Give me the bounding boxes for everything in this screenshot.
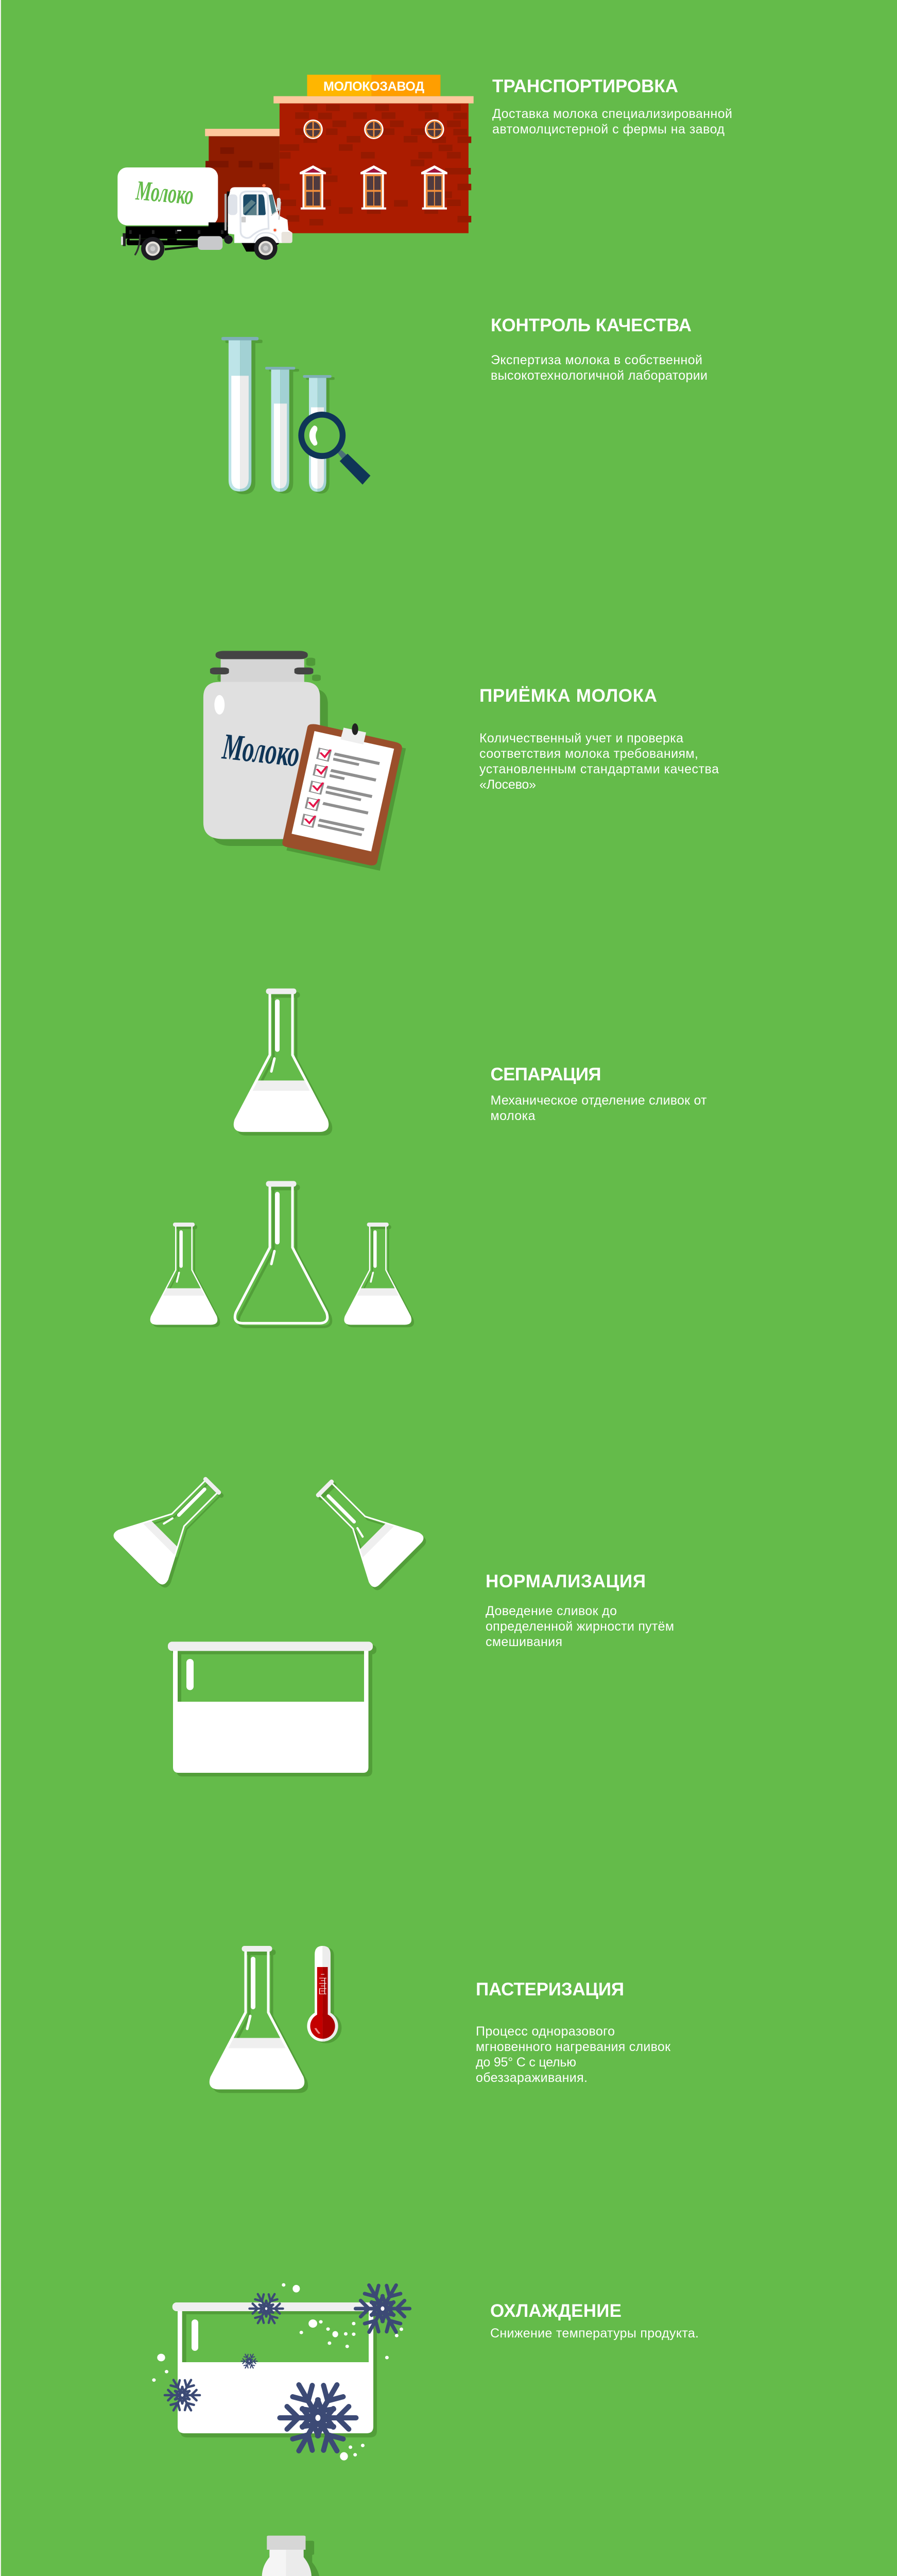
illustration: milk tanker truck [117,167,292,260]
description: соответствия молока требованиям, [479,747,698,761]
truck logo: Молоко [134,175,195,211]
illustration: cream bottle [248,2536,334,2576]
illustration: empty flask [235,1181,331,1327]
illustration: flask with cream [235,989,331,1134]
description: Механическое отделение сливок от [490,1093,707,1108]
illustration: left tilted flask [112,1460,241,1589]
illustration: test tubes and magnifier [221,337,370,494]
description: высокотехнологичной лаборатории [491,368,708,383]
description: Экспертиза молока в собственной [491,353,702,367]
illustration: milk can and clipboard [203,651,406,871]
heading: НОРМАЛИЗАЦИЯ [486,1571,646,1591]
panel: quality control [221,315,708,494]
panel: pasteurization [211,1946,671,2092]
heading: ПАСТЕРИЗАЦИЯ [476,1979,624,1999]
description: Снижение температуры продукта. [490,2326,699,2341]
panel: separation [151,989,707,1327]
panel: packaging [248,2536,707,2576]
illustration: beaker [173,2302,377,2437]
description [491,353,708,383]
icon: small snowflake [241,2353,257,2369]
description [490,1093,707,1123]
description: автомолцистерной с фермы на завод [492,122,725,137]
snow dots [152,2283,403,2461]
description: Доведение сливок до [486,1604,617,1618]
description: смешивания [486,1635,562,1649]
icon: top right snowflake [355,2281,410,2336]
description: Доставка молока специализированной [492,107,732,121]
description [476,2024,671,2085]
description [492,107,732,137]
panel: milk intake [203,651,719,871]
description: Количественный учет и проверка [479,731,683,745]
description [479,731,719,792]
description: определенной жирности путём [486,1619,674,1634]
illustration: right small flask [345,1223,413,1327]
panel: cooling [152,2281,699,2461]
description: до 95° С с целью [476,2055,576,2070]
icon: left snowflake [165,2377,200,2413]
illustration: milk factory [205,75,474,233]
panel: transportation [117,75,732,260]
description [486,1604,674,1649]
description: мгновенного нагревания сливок [476,2040,671,2054]
illustration: left small flask [151,1223,219,1327]
description: установленным стандартами качества [479,762,719,776]
description: обеззараживания. [476,2071,588,2085]
description: Процесс одноразового [476,2024,615,2039]
icon: top middle snowflake [249,2292,283,2326]
can logo: Молоко [220,725,302,775]
icon: large snowflake [280,2379,356,2456]
heading: ПРИЁМКА МОЛОКА [479,686,657,706]
factory sign text: МОЛОКОЗАВОД [323,79,424,94]
illustration: beaker [168,1641,376,1776]
description: «Лосево» [479,777,536,792]
illustration: right tilted flask [299,1462,427,1591]
description: молока [490,1109,536,1123]
illustration: clipboard [282,723,402,866]
heading: ТРАНСПОРТИРОВКА [492,76,678,96]
illustration: flask [211,1946,307,2092]
illustration: thermometer [307,1946,341,2043]
heading: СЕПАРАЦИЯ [490,1064,601,1084]
heading: ОХЛАЖДЕНИЕ [490,2301,622,2321]
heading: КОНТРОЛЬ КАЧЕСТВА [491,315,692,335]
panel: normalization [112,1460,674,1776]
